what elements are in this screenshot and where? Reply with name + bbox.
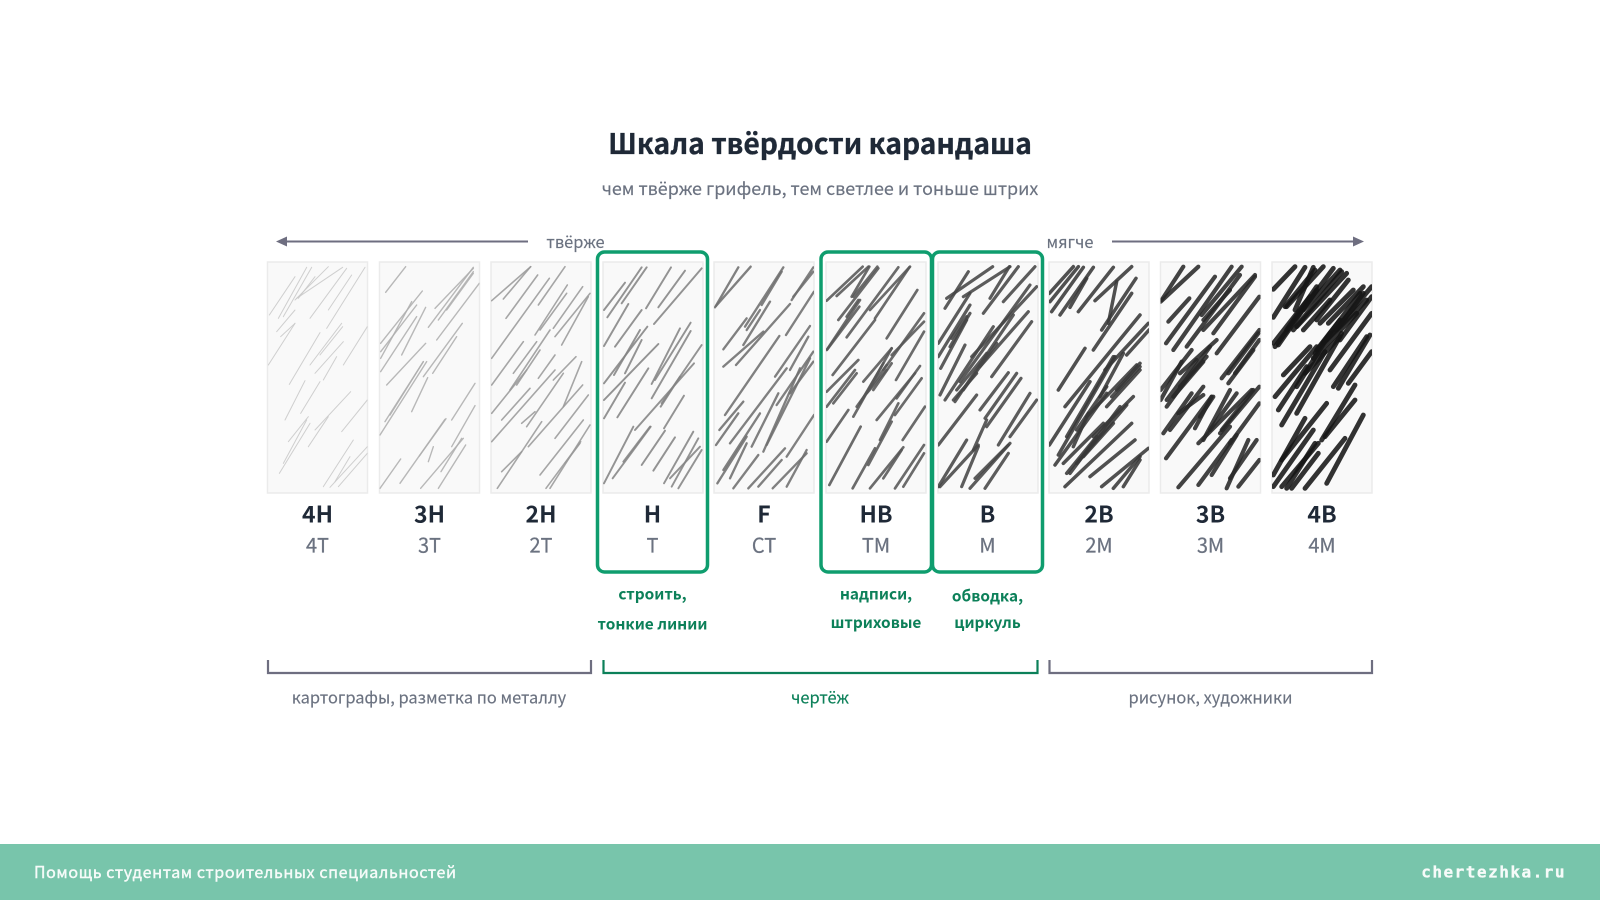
panel: B swatch — [938, 262, 1038, 493]
Russian grade labels: 4Т — [306, 530, 329, 558]
note: HB usage: штриховые — [831, 611, 921, 633]
bracket: drafting — [604, 660, 1038, 673]
panel: 2H swatch — [491, 262, 591, 493]
Russian grade labels: 2М — [1085, 530, 1113, 558]
note: H usage: строить, — [618, 582, 687, 604]
arrow: harder — [276, 236, 528, 246]
grade labels: HB — [859, 496, 893, 530]
grade labels: B — [980, 496, 995, 530]
Russian grade labels: 4М — [1308, 530, 1336, 558]
note: H usage: тонкие линии — [598, 612, 707, 634]
footer text: Помощь студентам строительных специальностей — [34, 859, 457, 883]
Russian grade labels: 2Т — [529, 530, 553, 558]
panel: 4B swatch — [1272, 262, 1372, 493]
footer site: chertezhka.ru — [1421, 862, 1566, 882]
subtitle: чем твёрже грифель, тем светлее и тоньше штрих — [602, 175, 1038, 201]
Russian grade labels: 3Т — [418, 530, 441, 558]
title: Шкала твёрдости карандаша — [608, 122, 1032, 163]
grade labels: 2H — [526, 496, 556, 530]
note: HB usage — [831, 582, 921, 633]
grade labels — [302, 496, 1337, 530]
panel: 3H swatch — [380, 262, 480, 493]
highlight frame: H — [598, 252, 708, 572]
footer bar — [0, 844, 1600, 900]
label: harder: твёрже — [546, 229, 605, 253]
highlight frame: HB — [821, 252, 932, 572]
panel: 2B swatch — [1049, 262, 1149, 493]
note: B usage — [952, 584, 1023, 633]
panel: 4H swatch — [268, 262, 368, 493]
Russian grade labels: М — [979, 530, 996, 558]
label: drafting: чертёж — [791, 684, 850, 708]
note: B usage: обводка, — [952, 584, 1023, 606]
grade labels: H — [644, 496, 661, 530]
grade labels: F — [757, 496, 771, 530]
panel: F swatch — [714, 262, 814, 493]
grade labels: 3B — [1196, 496, 1225, 530]
note: H usage — [598, 582, 707, 634]
Russian grade labels: СТ — [752, 530, 776, 558]
panel: HB swatch — [826, 262, 926, 493]
grade labels: 4H — [302, 496, 333, 530]
label: drawing: рисунок, художники — [1129, 684, 1292, 708]
Russian grade labels: Т — [647, 530, 659, 558]
label: softer: мягче — [1047, 229, 1093, 253]
label: cartographers: картографы, разметка по металлу — [292, 684, 567, 708]
panel: 3B swatch — [1160, 262, 1260, 493]
arrow: softer — [1112, 236, 1364, 246]
note: HB usage: надписи, — [840, 582, 912, 604]
highlight frame: B — [932, 252, 1042, 572]
bracket: cartographers — [268, 660, 591, 673]
grade labels: 3H — [414, 496, 445, 530]
grade labels: 4B — [1307, 496, 1337, 530]
panel: H swatch — [603, 262, 703, 493]
Russian grade labels — [306, 530, 1336, 558]
bracket: drawing — [1050, 660, 1372, 673]
grade labels: 2B — [1084, 496, 1114, 530]
note: B usage: циркуль — [954, 611, 1021, 633]
Russian grade labels: 3М — [1197, 530, 1224, 558]
Russian grade labels: ТМ — [862, 530, 890, 558]
